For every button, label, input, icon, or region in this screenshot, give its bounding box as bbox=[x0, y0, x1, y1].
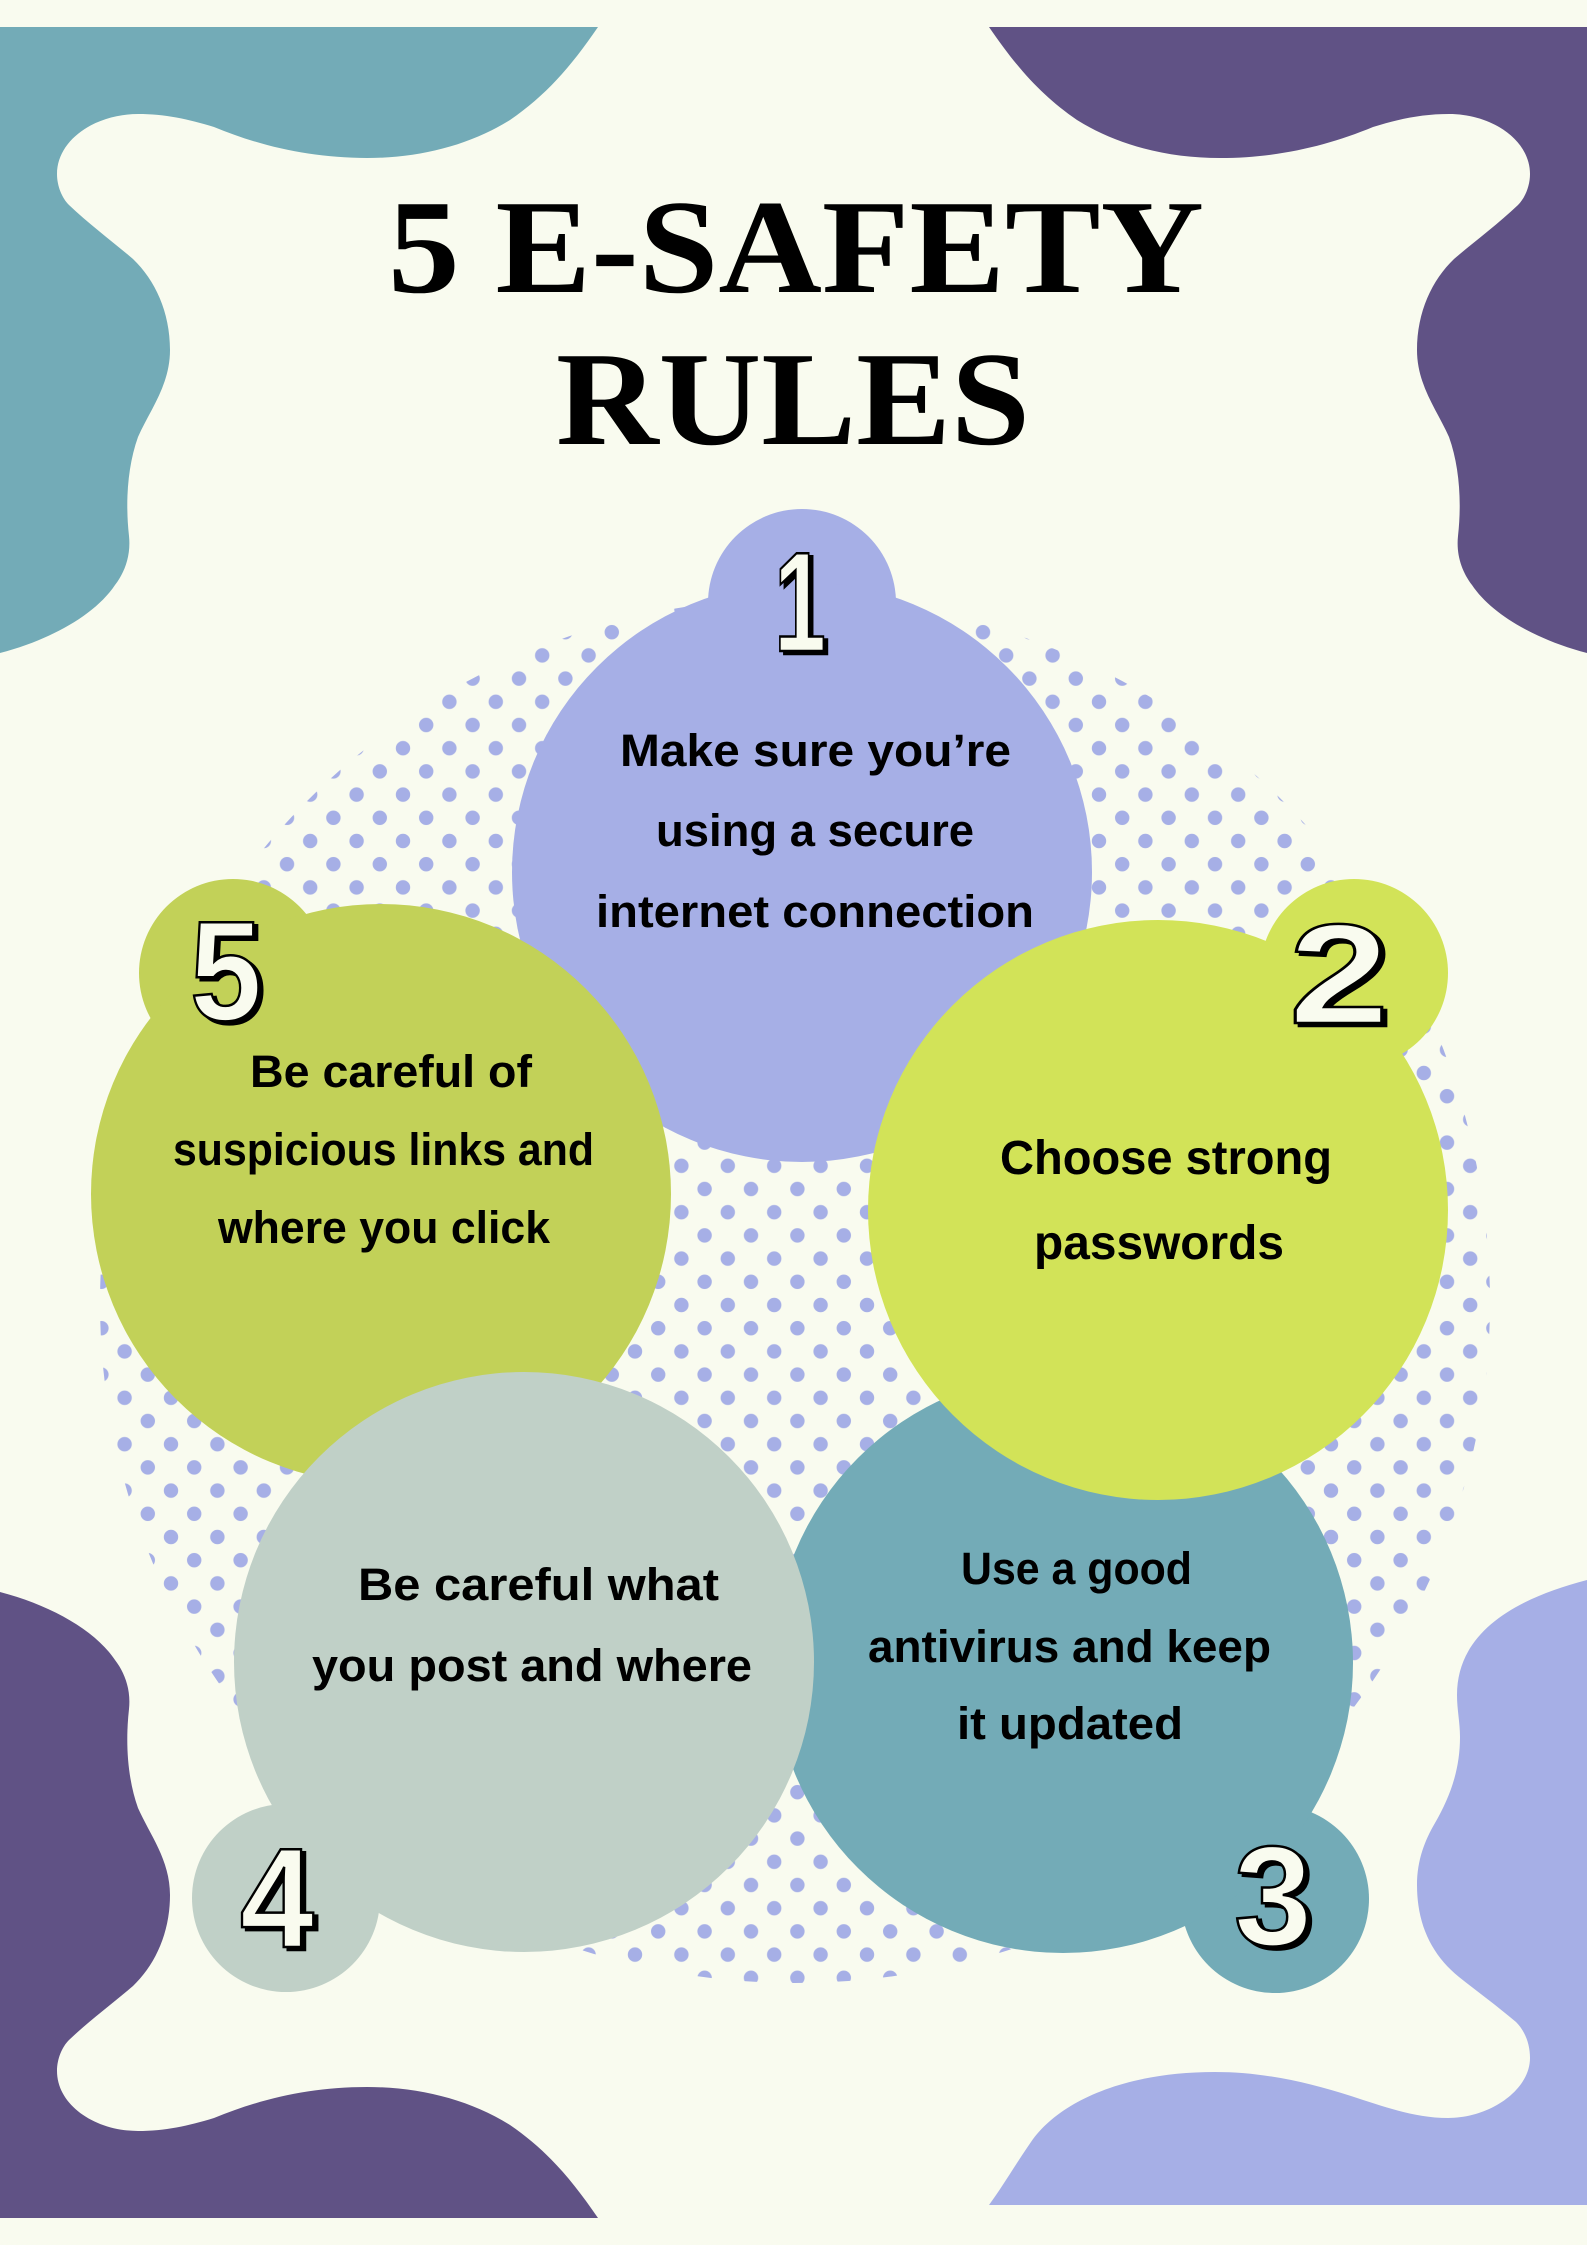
blob: top-right purple bbox=[989, 27, 1587, 653]
panel: rule 3 bbox=[773, 1373, 1369, 1993]
rule 2 text: Choose strong bbox=[1000, 1132, 1332, 1185]
rule 1 text: Make sure you’re bbox=[620, 725, 1011, 776]
blob: bottom-left purple bbox=[0, 1592, 598, 2218]
number 3: 3 bbox=[1234, 1817, 1312, 1976]
rule 5 text: suspicious links and bbox=[173, 1124, 594, 1175]
rule 5 text bbox=[173, 1046, 594, 1253]
rule 3 text bbox=[868, 1543, 1271, 1749]
rule 4 text: Be careful what bbox=[358, 1559, 719, 1610]
rule 1 text bbox=[596, 725, 1034, 937]
blob: bottom-right lavender bbox=[989, 1580, 1587, 2205]
rule 3 text: it updated bbox=[957, 1698, 1183, 1749]
panel: rule 4 bbox=[192, 1372, 814, 1992]
rule 2 text bbox=[1000, 1132, 1332, 1270]
rule 3 text: antivirus and keep bbox=[868, 1621, 1271, 1672]
blob: top-left teal bbox=[0, 27, 598, 653]
rule 1 text: using a secure bbox=[656, 805, 974, 856]
panel: rule 5 bbox=[91, 879, 671, 1484]
rule 3 text: Use a good bbox=[961, 1543, 1192, 1594]
panel: rule 2 bbox=[868, 879, 1448, 1500]
number 1: 1 bbox=[774, 523, 826, 682]
title: 5 E-SAFETY bbox=[388, 173, 1204, 321]
rule 1 text: internet connection bbox=[596, 886, 1034, 937]
rule 5 text: Be careful of bbox=[250, 1046, 533, 1097]
rule 4 text: you post and where bbox=[312, 1640, 752, 1691]
dot pattern backdrop bbox=[100, 598, 1490, 1983]
number 5: 5 bbox=[190, 892, 262, 1051]
number 2: 2 bbox=[1289, 895, 1389, 1054]
number 4: 4 bbox=[240, 1819, 314, 1978]
rule 2 text: passwords bbox=[1034, 1217, 1284, 1270]
rule 4 text bbox=[312, 1559, 752, 1691]
title bbox=[388, 173, 1204, 473]
title: RULES bbox=[556, 325, 1030, 473]
rule 5 text: where you click bbox=[217, 1202, 551, 1253]
panel: rule 1 bbox=[512, 509, 1092, 1162]
